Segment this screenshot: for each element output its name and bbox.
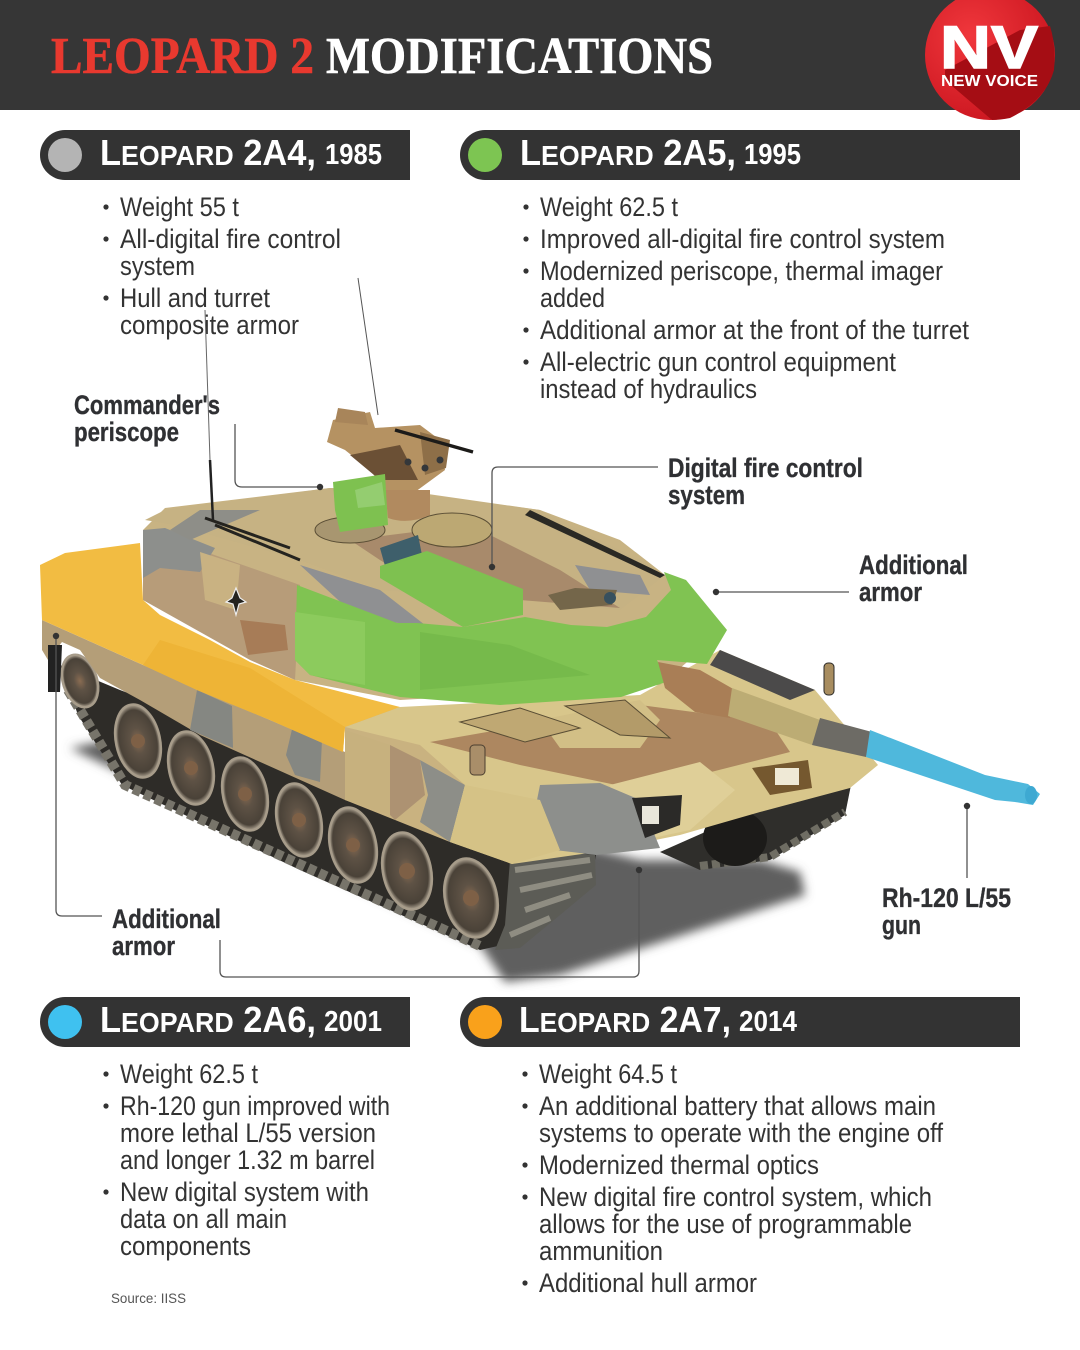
- text block: 2A4 features: Hull and turret: [120, 283, 270, 313]
- mirrors: [470, 745, 485, 775]
- armor overlay: green turret: [295, 572, 727, 705]
- turret side rear: [143, 530, 300, 680]
- road wheels: [55, 650, 505, 943]
- callout: Rh-120 gun: [882, 803, 1011, 940]
- text block: 2A5 features: added: [540, 283, 605, 313]
- text block: 2A7 features: systems to operate with the engine off: [539, 1118, 943, 1148]
- callout: Digital fire control system: [489, 453, 863, 570]
- title: MODIFICATIONS: [326, 28, 713, 85]
- Iron cross: [226, 588, 246, 615]
- callout: Additional armor turret: armor: [859, 577, 922, 607]
- text block: 2A4 features: system: [120, 251, 195, 281]
- panel: Leopard 2A4 heading: [40, 130, 410, 180]
- hull hatches: [460, 708, 580, 742]
- blue barrel: [866, 730, 1040, 805]
- panel: Leopard 2A5 heading: 1995: [744, 139, 801, 171]
- callout: Commander's periscope: periscope: [74, 417, 179, 447]
- callout: Rh-120 gun: gun: [882, 910, 921, 940]
- tank illustration: [40, 408, 1040, 982]
- panel: Leopard 2A7 heading: [460, 997, 1020, 1047]
- text block: 2A7 features: New digital fire control system, which: [539, 1182, 932, 1212]
- logo: New Voice: NEW VOICE: [941, 73, 1038, 90]
- text block: 2A5 features: Additional armor at the front of the turret: [540, 315, 969, 345]
- callout: Additional armor turret: Additional: [859, 550, 968, 580]
- text block: 2A4 features: All-digital fire control: [120, 224, 341, 254]
- panel: Leopard 2A6 heading: [40, 997, 410, 1047]
- text block: 2A7 features: allows for the use of programmable: [539, 1209, 912, 1239]
- callout: Commander's periscope: [74, 390, 323, 490]
- panel: Leopard 2A4 heading: 1985: [325, 139, 382, 171]
- remote weapon station: [327, 412, 445, 495]
- text block: 2A7 features: An additional battery that allows main: [539, 1091, 936, 1121]
- text block: 2A7 features: [522, 1059, 943, 1298]
- text block: 2A6 features: and longer 1.32 m barrel: [120, 1145, 375, 1175]
- title: [51, 28, 713, 85]
- text block: 2A4 features: composite armor: [120, 310, 299, 340]
- turret base: [143, 488, 725, 700]
- text block: 2A6 features: data on all main: [120, 1204, 287, 1234]
- text block: 2A6 features: more lethal L/55 version: [120, 1118, 376, 1148]
- text block: 2A4 features: Weight 55 t: [120, 192, 239, 222]
- callout: Commander's periscope: Commander's: [74, 390, 220, 420]
- callout: Rh-120 gun: Rh-120 L/55: [882, 883, 1011, 913]
- logo: New Voice: NV: [940, 14, 1038, 81]
- text block: 2A7 features: Modernized thermal optics: [539, 1150, 819, 1180]
- panel: Leopard 2A5 heading: LEOPARD 2A5,: [520, 132, 736, 173]
- text block: 2A5 features: Modernized periscope, thermal imager: [540, 256, 943, 286]
- text block: 2A5 features: Improved all-digital fire control system: [540, 224, 945, 254]
- panel: Leopard 2A4 heading: LEOPARD 2A4,: [100, 132, 316, 173]
- antennas: [205, 278, 378, 520]
- callout: Digital fire control system: system: [668, 480, 745, 510]
- text block: 2A6 features: Rh-120 gun improved with: [120, 1091, 390, 1121]
- panel: Leopard 2A6 heading: LEOPARD 2A6,: [100, 999, 316, 1040]
- callout: Additional armor turret: [713, 550, 968, 607]
- text block: 2A6 features: Weight 62.5 t: [120, 1059, 258, 1089]
- callout: Additional armor hull: armor: [112, 931, 175, 961]
- hull side camouflage: [345, 707, 470, 842]
- source note: Source: IISS: [111, 1290, 186, 1306]
- turret roof detail: [145, 488, 665, 610]
- hull front gray panel: [535, 783, 660, 855]
- panel: Leopard 2A7 heading: 2014: [739, 1006, 797, 1038]
- headlights: [632, 795, 682, 838]
- header band: [0, 0, 1080, 110]
- text block: 2A4 features: [103, 192, 341, 340]
- panel: Leopard 2A5 heading: [460, 130, 1020, 180]
- text block: 2A6 features: New digital system with: [120, 1177, 369, 1207]
- callout: Digital fire control system: Digital fire control: [668, 453, 863, 483]
- text block: 2A5 features: Weight 62.5 t: [540, 192, 678, 222]
- callout: Additional armor hull: [53, 633, 642, 977]
- armor overlay: rear orange: [40, 543, 400, 752]
- tracks: [60, 665, 597, 950]
- panel: Leopard 2A6 heading: 2001: [324, 1006, 382, 1038]
- text block: 2A5 features: All-electric gun control equipment: [540, 347, 896, 377]
- panel: Leopard 2A7 heading: LEOPARD 2A7,: [519, 999, 731, 1040]
- logo: New Voice: [925, 0, 1055, 120]
- text block: 2A7 features: ammunition: [539, 1236, 663, 1266]
- front hull / glacis: [345, 650, 878, 864]
- text block: 2A5 features: instead of hydraulics: [540, 374, 757, 404]
- text block: 2A7 features: Additional hull armor: [539, 1268, 757, 1298]
- text block: 2A7 features: Weight 64.5 t: [539, 1059, 677, 1089]
- callout: Additional armor hull: Additional: [112, 904, 221, 934]
- title: LEOPARD 2: [51, 28, 314, 85]
- text block: 2A6 features: components: [120, 1231, 251, 1261]
- ground shadow: [70, 740, 805, 982]
- text block: 2A5 features: [523, 192, 969, 404]
- rear hull side: [42, 620, 345, 800]
- gun: [658, 662, 735, 718]
- text block: 2A6 features: [103, 1059, 390, 1261]
- front sprocket and links: [495, 850, 596, 950]
